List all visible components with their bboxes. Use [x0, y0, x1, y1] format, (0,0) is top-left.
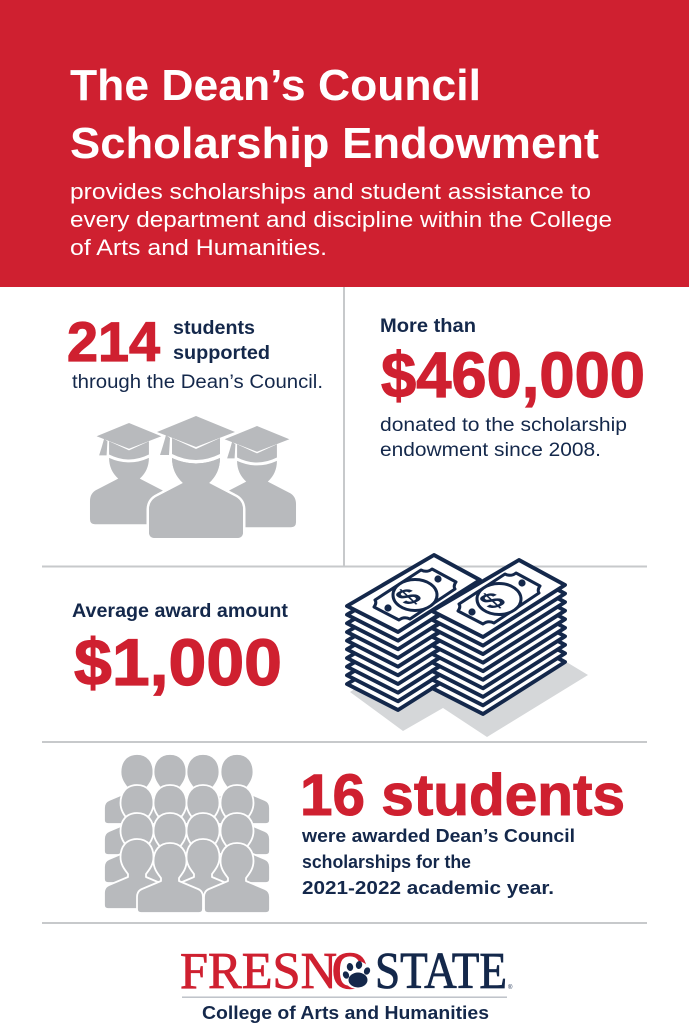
- header panel: [0, 0, 689, 287]
- stat: $460,000: $460,000: [381, 339, 645, 411]
- donated text: [380, 414, 627, 461]
- logo: Fresno State: [180, 943, 513, 1023]
- students supported label: students: [173, 318, 255, 339]
- header description: provides scholarships and student assistance to: [70, 179, 591, 204]
- title: Scholarship Endowment: [70, 119, 599, 168]
- wordmark: FRESN: [180, 943, 337, 1000]
- header description: every department and discipline within the College: [70, 207, 612, 232]
- average award label: Average award amount: [72, 601, 289, 622]
- stat: $1,000: $1,000: [74, 625, 282, 699]
- donated text: donated to the scholarship: [380, 414, 627, 436]
- students supported label: [173, 318, 270, 364]
- title: [70, 61, 599, 168]
- stat: 16 students: 16 students: [300, 763, 625, 828]
- awarded text: 2021-2022 academic year.: [302, 877, 554, 898]
- panel: average award: [72, 555, 588, 737]
- title: The Dean’s Council: [70, 61, 481, 110]
- awarded text: were awarded Dean’s Council: [301, 825, 575, 846]
- icon: graduates: [90, 413, 296, 538]
- donated text: endowment since 2008.: [380, 439, 601, 461]
- header description: [70, 179, 612, 260]
- awarded text: scholarships for the: [302, 851, 471, 872]
- icon: crowd: [104, 754, 270, 913]
- icon: money stacks: [347, 555, 588, 737]
- wordmark: [180, 943, 513, 1000]
- panel: amount donated: [380, 316, 645, 461]
- stat: 214: 214: [67, 310, 160, 373]
- college name: College of Arts and Humanities: [202, 1003, 489, 1023]
- panel: 16 students: [104, 754, 625, 913]
- students supported label: supported: [173, 343, 270, 364]
- icon: paw: [342, 961, 371, 988]
- awarded text: [301, 825, 575, 898]
- more than label: More than: [380, 316, 476, 337]
- wordmark: STATE: [375, 943, 507, 1000]
- header description: of Arts and Humanities.: [70, 235, 327, 260]
- through text: through the Dean’s Council.: [72, 372, 323, 393]
- panel: students supported: [67, 310, 323, 538]
- wordmark: O: [332, 943, 368, 1000]
- wordmark: ®: [508, 984, 513, 991]
